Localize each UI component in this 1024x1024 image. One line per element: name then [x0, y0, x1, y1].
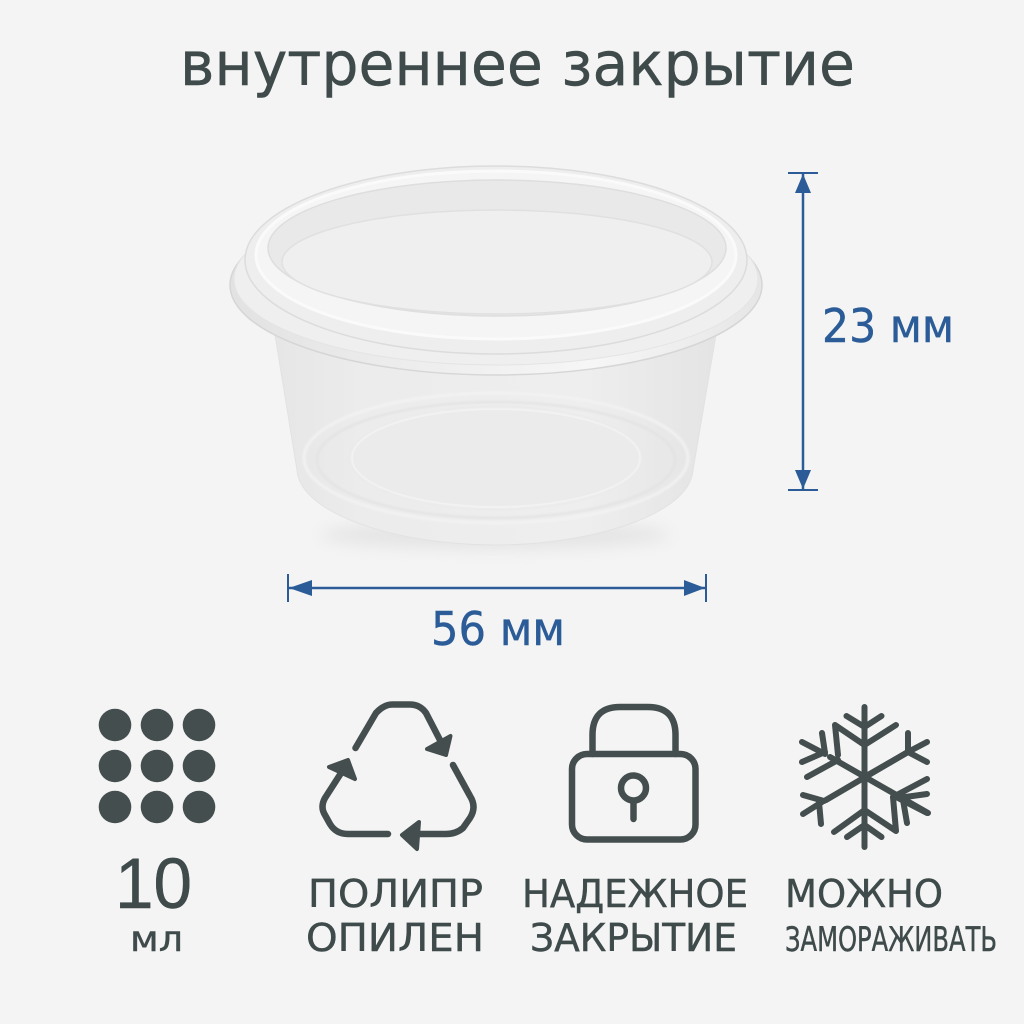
height dimension arrow	[788, 173, 818, 490]
icon: volume dots	[99, 709, 215, 823]
lock label: НАДЕЖНОЕ	[522, 872, 748, 916]
freeze label: МОЖНО	[785, 872, 943, 916]
icon: padlock	[572, 707, 696, 840]
icon: snowflake	[802, 707, 928, 847]
volume unit: мл	[130, 919, 183, 960]
recycling label	[306, 872, 484, 960]
recycling label: ОПИЛЕН	[306, 916, 484, 960]
recycling label: ПОЛИПР	[308, 872, 483, 916]
product photo: transparent container	[230, 166, 762, 549]
height label: 23 мм	[822, 299, 954, 353]
freeze label	[785, 872, 997, 960]
lock label: ЗАКРЫТИЕ	[530, 916, 737, 960]
title: внутреннее закрытие	[180, 29, 855, 100]
icon: recycling	[322, 704, 474, 849]
width label: 56 мм	[431, 602, 565, 656]
volume value: 10	[115, 845, 192, 924]
lock label	[522, 872, 748, 960]
width dimension arrow	[288, 574, 706, 602]
